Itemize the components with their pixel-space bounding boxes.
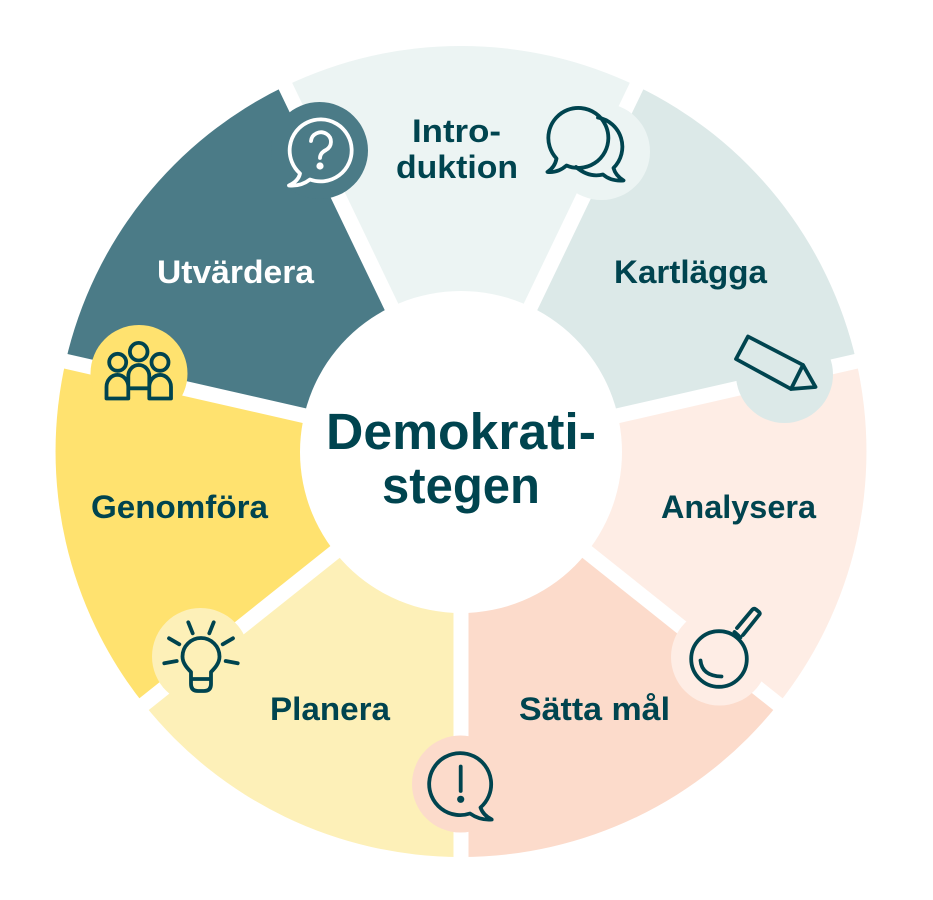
icon: group of people xyxy=(90,325,188,422)
center circle xyxy=(300,291,622,613)
icon: exclamation speech bubble xyxy=(412,736,509,832)
label: Sätta mål: Sätta mål xyxy=(519,691,670,727)
label: Introduktion: duktion xyxy=(396,149,518,185)
panel: Sätta mål xyxy=(461,452,778,857)
panel: Introduktion xyxy=(285,46,637,452)
title: Demokrati-stegen: Demokrati- xyxy=(326,403,596,460)
panel: Utvärdera xyxy=(66,86,461,451)
label: Planera: Planera xyxy=(270,691,390,727)
title: Demokrati-stegen: stegen xyxy=(382,457,540,514)
panel: Analysera xyxy=(461,361,866,704)
label: Kartlägga: Kartlägga xyxy=(614,254,767,290)
icon: two speech bubbles xyxy=(548,103,650,200)
label: Genomföra: Genomföra xyxy=(91,489,268,525)
label: Utvärdera: Utvärdera xyxy=(157,254,314,290)
icon: magnifying glass xyxy=(671,608,768,706)
icon: light bulb xyxy=(152,608,249,705)
icon: pencil xyxy=(736,326,833,423)
icon: question speech bubble xyxy=(271,102,368,199)
label: Introduktion: Intro- xyxy=(412,113,501,149)
panel: Kartlägga xyxy=(461,86,856,451)
panel: Genomföra xyxy=(56,361,461,704)
label: Analysera: Analysera xyxy=(661,489,816,525)
panel: Planera xyxy=(144,452,461,857)
